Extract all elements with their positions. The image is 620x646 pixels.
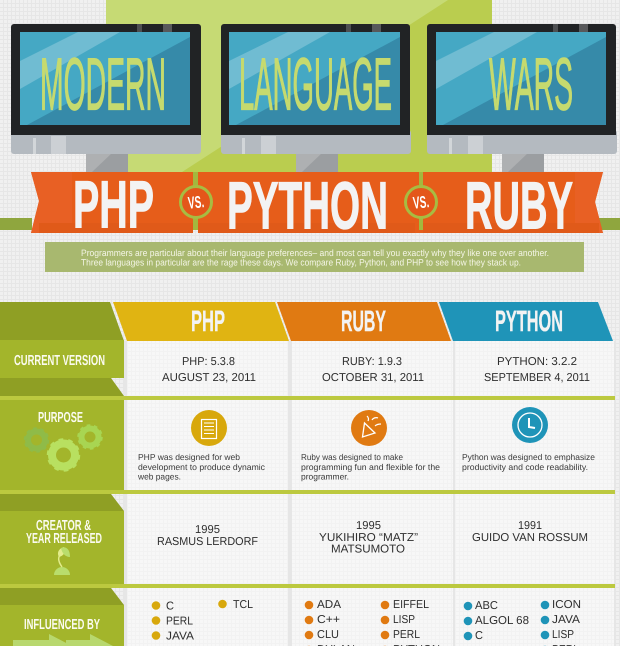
cell: PHP current version: AUGUST 23, 2011 [162,372,256,384]
vs badge 2 [406,186,436,218]
cell: Ruby purpose: programming fun and flexible for the [301,462,440,472]
cell: PHP creator [157,524,258,548]
list: Python influences: C [475,630,483,642]
list: Ruby influences: EIFFEL [393,599,430,611]
icon: arrows [13,634,113,646]
table column backgrounds [124,341,615,646]
cell: Ruby creator: 1995 [356,520,381,532]
intro text box: Three languages in particular are the rage these days. We compare Ruby, Python, and PHP to see how they stack up. [81,258,521,268]
icon: party popper [351,410,387,446]
icon: sprout [54,547,70,575]
cell: PHP creator: RASMUS LERDORF [157,536,258,548]
intro text box: Programmers are particular about their language preferences– and most can tell you exactly why they like one over another. [81,248,549,258]
list: Python influences: LISP [552,629,574,641]
cell: Ruby current version [322,356,424,384]
list: Python influences: ICON [552,599,581,611]
list: Ruby influences: C++ [317,614,340,626]
cell: Python current version [484,356,590,384]
banner word: Python: PYTHON [227,168,388,244]
list: PHP influences: PERL [166,616,194,628]
monitor: Wars [427,24,617,174]
monitor: Language [221,24,411,174]
cell: Ruby creator: YUKIHIRO “MATZ” [319,532,418,544]
row label: influenced by: INFLUENCED BY [24,617,100,633]
icon: gears [26,426,101,470]
cell: PHP current version: PHP: 5.3.8 [182,356,235,368]
list: PHP influences: JAVA [166,630,194,642]
row label: purpose [0,400,124,490]
cell: PHP current version [162,356,256,384]
cell: Python creator: 1991 [518,520,542,532]
row divider lines [0,396,615,588]
cell: Python current version: PYTHON: 3.2.2 [497,356,577,368]
row label: current version [0,340,124,396]
list: Ruby influences: PERL [393,629,421,641]
cell: PHP purpose: web pages. [137,472,181,482]
list: Python influences: ABC [475,600,498,612]
list: PHP influences [152,599,254,646]
row label: current version: CURRENT VERSION [14,353,105,369]
cell: Ruby purpose [301,452,440,482]
cell: Python purpose: productivity and code readability. [462,462,588,472]
cell: Ruby current version: OCTOBER 31, 2011 [322,372,424,384]
cell: PHP creator: 1995 [195,524,220,536]
row label: influenced by [0,588,124,646]
list: Ruby influences: LISP [393,614,415,626]
cell: Ruby purpose: Ruby was designed to make [301,452,403,462]
list: Python influences: JAVA [552,614,580,626]
cell: Ruby current version: RUBY: 1.9.3 [342,356,402,368]
text: MODERN [40,42,166,126]
header tab: Ruby [277,302,451,341]
list: PHP influences: C [166,600,174,612]
cell: Ruby creator [319,520,418,556]
header tab: PHP: PHP [191,305,225,338]
row label: creator and year released: CREATOR & [36,518,91,534]
row label: creator and year released [0,494,124,584]
vs badge 1 [180,186,212,218]
list: Python influences: ALGOL 68 [475,615,529,627]
header tab: Ruby: RUBY [341,305,386,338]
row label: creator and year released: YEAR RELEASED [26,531,102,547]
header tab: Python [439,302,613,341]
vs badge 2: VS. [412,192,430,213]
cell: Python creator: GUIDO VAN ROSSUM [472,532,588,544]
cell: Python purpose: Python was designed to emphasize [462,452,595,462]
icon: clock [512,407,548,443]
monitor: Modern [11,24,201,174]
cell: PHP purpose [137,452,266,482]
cell: Python creator [472,520,588,544]
cell: Ruby purpose: programmer. [301,472,349,482]
green line behind the banner [0,218,620,230]
list: Ruby influences [305,599,440,646]
cell: Ruby creator: MATSUMOTO [331,544,405,556]
cell: Python current version: SEPTEMBER 4, 2011 [484,372,590,384]
cell: PHP purpose: PHP was designed for web [138,452,240,462]
row label: purpose: PURPOSE [38,410,83,426]
cell: PHP purpose: development to produce dynamic [138,462,266,472]
list: PHP influences: TCL [233,599,254,611]
cell: Python purpose [462,452,595,472]
list: Python influences [464,599,581,646]
banner word: PHP: PHP [73,168,154,242]
vs badge 1: VS. [187,192,205,213]
list: Ruby influences: ADA [317,599,341,611]
list: Ruby influences: CLU [317,629,339,641]
left header block [0,302,124,341]
green backdrop behind the monitors [106,0,492,172]
orange banner [31,168,603,244]
icon: document [191,410,227,446]
intro text box [45,242,584,272]
header tab: Python: PYTHON [495,305,563,338]
header tab: PHP [113,302,289,341]
